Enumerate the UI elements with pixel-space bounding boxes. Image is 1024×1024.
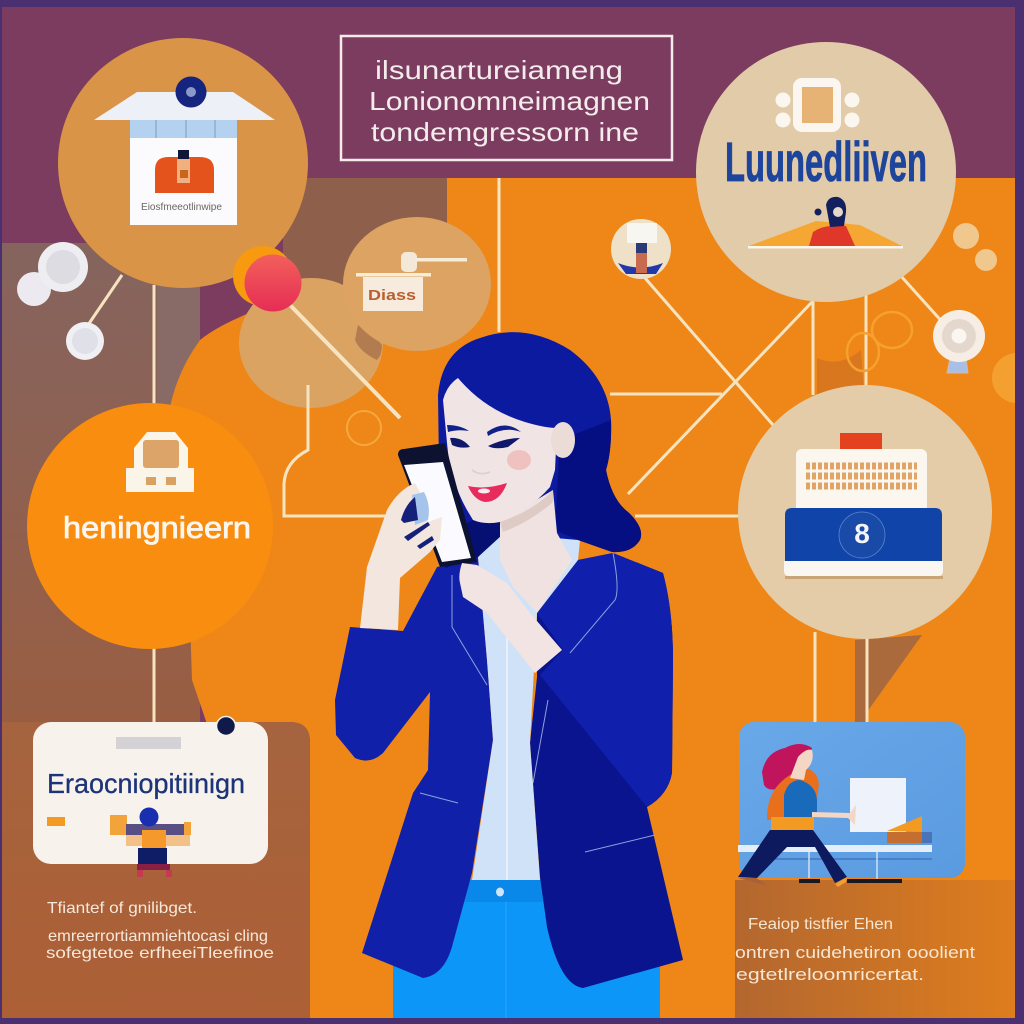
- text block: bottom-left: Tfiantef of gnilibget.: [47, 900, 197, 917]
- text block: bottom-left: emreerrortiammiehtocasi cling: [48, 928, 268, 945]
- decorative circle backing: [239, 278, 383, 408]
- cheek: [507, 450, 531, 470]
- jacket left panel and sleeve: [335, 557, 493, 978]
- icon: speaker node: [933, 310, 985, 373]
- ear: [551, 422, 575, 458]
- decorative dots and rings right: [347, 223, 1024, 445]
- eyes and brows: [447, 425, 521, 436]
- panel: bottom-left card: [33, 716, 268, 877]
- panel: top-left store circle: [58, 38, 308, 288]
- icon: keyboard machine: 8: [854, 518, 870, 549]
- illustration: person at table: [110, 808, 191, 877]
- lips: [468, 483, 507, 502]
- phone: [398, 443, 477, 567]
- hair: [438, 332, 641, 568]
- panel: Diass circle: [343, 217, 491, 351]
- panel: orange circle: [27, 403, 273, 649]
- panel: Diass circle: Diass: [368, 287, 416, 304]
- panel: top-right circle: [696, 42, 956, 302]
- title box: ilsunartureiameng: [375, 55, 623, 85]
- icon: device: [776, 78, 860, 132]
- icon: bag: [126, 432, 194, 492]
- illustration: person at desk: [748, 197, 903, 248]
- text block: bottom-left: sofegtetoe erfheeiTleefinoe: [46, 945, 274, 962]
- text block: bottom-right: egtetlreloomricertat.: [736, 965, 924, 984]
- jacket right sleeve: [537, 553, 673, 807]
- other hand and forearm: [459, 563, 562, 673]
- jeans: [393, 880, 660, 1018]
- icon: store: [94, 76, 275, 225]
- jacket seams: [420, 553, 655, 852]
- text block: bottom-right: Feaiop tistfier Ehen: [748, 916, 893, 933]
- text block: bottom-right: ontren cuidehetiron ooolient: [735, 943, 975, 962]
- panel: orange circle: heningnieern: [63, 510, 251, 545]
- connector lines: [88, 178, 945, 722]
- panel: bottom-left card: Eraocniopitiinign: [47, 768, 245, 799]
- illustration: woman with phone: [335, 332, 683, 1018]
- shirt: [472, 530, 580, 880]
- title box: Lonionomneimagnen: [369, 86, 650, 116]
- title box: tondemgressorn ine: [371, 117, 639, 147]
- neck: [500, 490, 572, 613]
- icon: store: Eiosfmeeotlinwipe: [141, 202, 222, 213]
- jacket right panel: [530, 553, 683, 988]
- icon: red ball: [233, 246, 302, 312]
- text block: bottom-right: [735, 916, 975, 984]
- illustration: woman pushing: [738, 744, 856, 887]
- small white nodes left: [17, 242, 104, 360]
- small icon circle: [611, 219, 671, 279]
- icon: keyboard machine: [784, 433, 943, 579]
- title box: [341, 36, 672, 160]
- text block: bottom-left: [46, 900, 274, 962]
- face: [443, 378, 557, 523]
- phone hand: [360, 483, 442, 630]
- panel: right device circle: [738, 385, 992, 639]
- panel: bottom-right illustration card: [738, 722, 965, 887]
